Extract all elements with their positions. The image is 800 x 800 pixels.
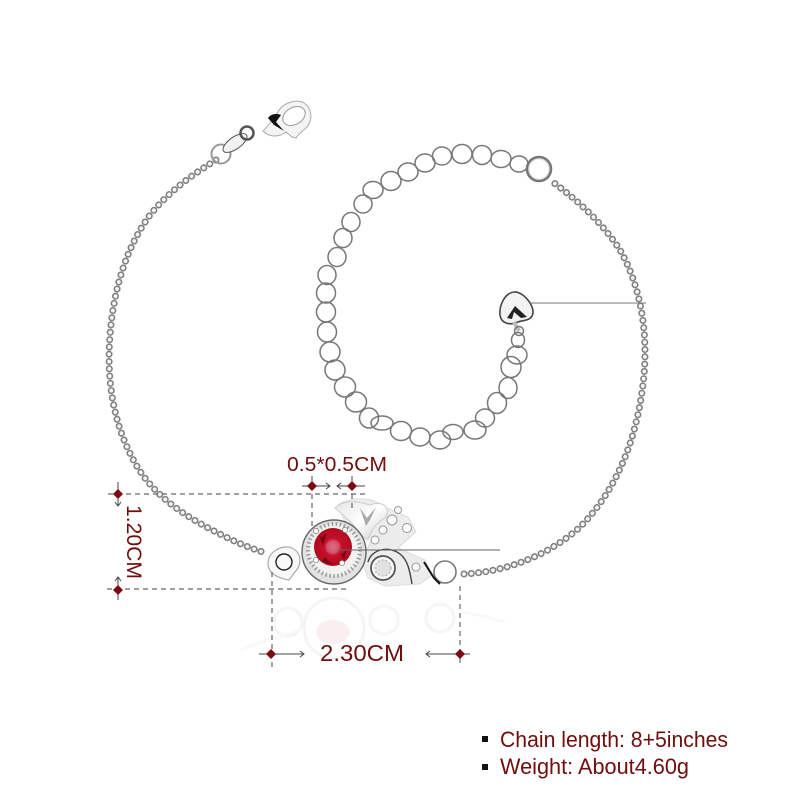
lobster clasp <box>212 101 311 164</box>
main chain: left side <box>109 160 266 553</box>
extender chain <box>316 144 528 449</box>
bullet <box>482 764 488 770</box>
left connector loop <box>268 547 300 580</box>
heart charm <box>500 292 533 336</box>
label: gem size: 0.5*0.5CM <box>287 454 387 476</box>
pendant reflection <box>240 598 505 658</box>
label: pendant height: 1.20CM <box>122 505 145 579</box>
halo circle <box>302 520 366 584</box>
pave stones <box>371 506 420 571</box>
specifications list <box>482 727 728 779</box>
right scroll body <box>338 499 432 586</box>
scroll stroke <box>368 549 412 584</box>
extender end ring <box>527 157 551 181</box>
right connector loop <box>424 561 456 584</box>
main chain: right side <box>464 180 645 574</box>
bullet <box>482 736 488 742</box>
dimension guides <box>107 476 460 667</box>
gem prongs <box>313 527 348 566</box>
pointer line from pendant <box>338 549 500 551</box>
label: pendant width: 2.30CM <box>320 640 404 666</box>
M shaped heart top <box>335 502 387 540</box>
pointer line from heart charm <box>530 302 646 304</box>
small white stone <box>371 556 395 580</box>
weight: Weight: About4.60g <box>500 754 689 779</box>
dimension arrows and markers <box>113 481 470 659</box>
chain length: Chain length: 8+5inches <box>500 727 728 752</box>
red gem <box>314 528 352 566</box>
pendant <box>268 499 456 586</box>
